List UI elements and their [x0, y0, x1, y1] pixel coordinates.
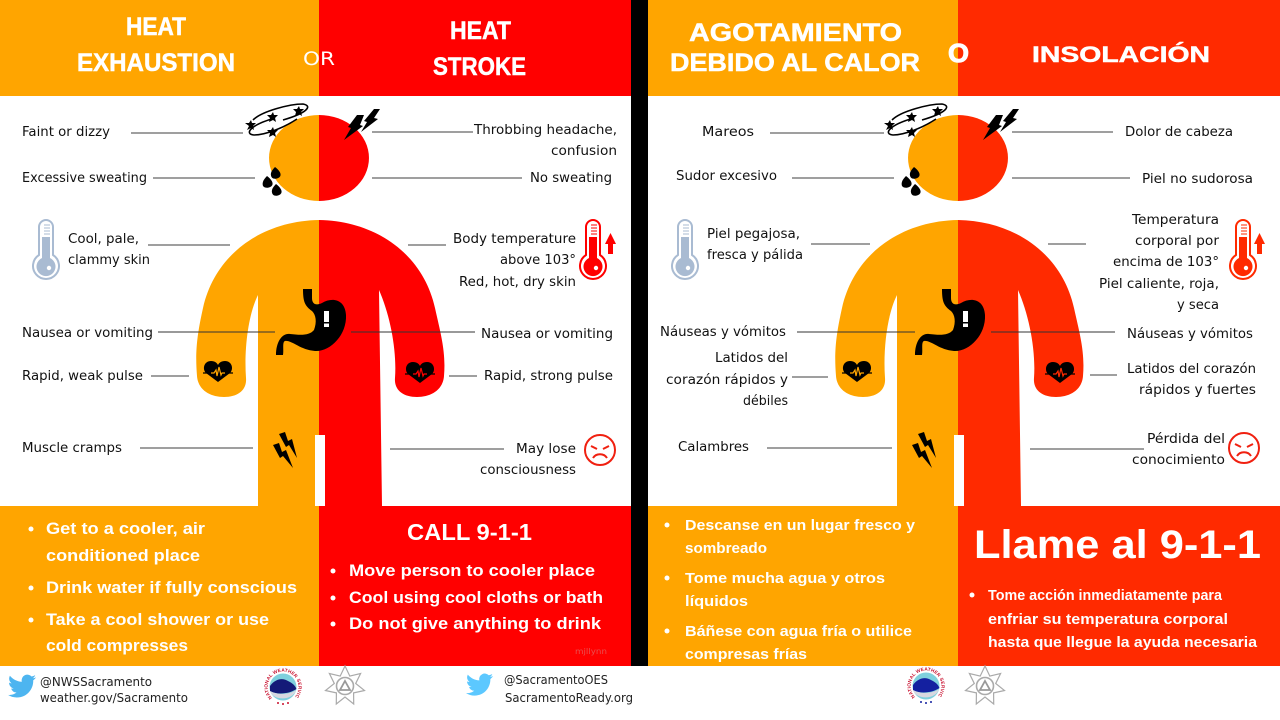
header: heat stroke: HEAT: [450, 17, 511, 45]
header: heat exhaustion: HEAT: [126, 13, 186, 41]
footer text: NWS contacts: weather.gov/Sacramento: [40, 690, 188, 705]
icon: headache lightning: [983, 109, 1019, 140]
header connector: or: OR: [303, 48, 335, 70]
symptoms: exhaustion labels: Cool, pale,: [68, 232, 139, 247]
action panel: agotamiento: líquidos: [685, 593, 748, 610]
symptoms: insolacion labels: conocimiento: [1132, 453, 1225, 468]
logo: National Weather Service: NATIONAL WEATHER SERVICE: [264, 668, 302, 700]
symptoms: agotamiento labels: Latidos del: [715, 351, 788, 366]
symptoms: insolacion labels: [991, 125, 1256, 468]
symptoms: stroke labels: Body temperature: [453, 232, 576, 247]
symptoms: agotamiento labels: Mareos: [702, 125, 754, 140]
icon: weak pulse heart: [203, 361, 233, 382]
action panel: agotamiento: Báñese con agua fría o utilice: [685, 623, 912, 640]
action panel: insolacion: Tome acción inmediatamente para: [988, 587, 1223, 604]
symptoms: stroke labels: above 103°: [500, 253, 576, 268]
footer text: OES contacts: SacramentoReady.org: [505, 690, 633, 705]
action panel: agotamiento: Tome mucha agua y otros: [685, 570, 885, 587]
action panel: insolacion: [958, 506, 1280, 666]
header: heat stroke: STROKE: [433, 53, 526, 81]
icon: stomach: [276, 289, 346, 355]
icon: sad face: [1229, 433, 1259, 463]
icon: dizziness stars: [884, 104, 947, 137]
symptoms: insolacion labels: Pérdida del: [1147, 432, 1225, 447]
icon: sweat drops: [263, 167, 282, 196]
symptoms: exhaustion labels: Rapid, weak pulse: [22, 369, 143, 384]
action panel: insolacion: enfriar su temperatura corporal: [988, 611, 1228, 628]
symptoms: insolacion labels: encima de 103°: [1113, 255, 1219, 270]
symptoms: agotamiento labels: Piel pegajosa,: [707, 227, 800, 242]
symptoms: exhaustion labels: [22, 125, 275, 456]
symptoms: stroke labels: [351, 123, 617, 478]
logo: OES star, Spanish panel: [966, 666, 1004, 704]
action panel: insolacion: hasta que llegue la ayuda necesaria: [988, 634, 1258, 651]
header: heat exhaustion: EXHAUSTION: [77, 49, 235, 77]
action panel: exhaustion: [0, 506, 319, 666]
action panel: exhaustion: conditioned place: [46, 546, 200, 565]
symptoms: insolacion labels: y seca: [1177, 298, 1219, 313]
action panel: exhaustion: Drink water if fully conscious: [46, 578, 297, 597]
symptoms: insolacion labels: Piel no sudorosa: [1142, 172, 1253, 187]
icon: hot thermometer and arrow: [580, 220, 616, 279]
symptoms: agotamiento labels: fresca y pálida: [707, 248, 803, 263]
symptoms: stroke labels: Rapid, strong pulse: [484, 369, 613, 384]
symptoms: stroke labels: Nausea or vomiting: [481, 327, 613, 342]
action panel: exhaustion: Take a cool shower or use: [46, 610, 269, 629]
action panel: agotamiento: Descanse en un lugar fresco y: [685, 517, 916, 534]
action panel: agotamiento: sombreado: [685, 540, 767, 557]
symptoms: stroke labels: Throbbing headache,: [473, 123, 617, 138]
symptoms: agotamiento labels: Náuseas y vómitos: [660, 325, 786, 340]
symptoms: exhaustion labels: Nausea or vomiting: [22, 326, 153, 341]
action panel: stroke: Move person to cooler place: [349, 561, 595, 580]
header: heat stroke: [319, 0, 631, 96]
footer text: OES contacts: [504, 672, 633, 705]
action panel: exhaustion: Get to a cooler, air: [46, 519, 205, 538]
icon: cool thermometer: [672, 220, 698, 279]
action panel: exhaustion: cold compresses: [46, 636, 188, 655]
symptoms: agotamiento labels: Calambres: [678, 440, 749, 455]
action panel: agotamiento: [648, 506, 958, 666]
header: heat exhaustion: [0, 0, 319, 96]
symptoms: insolacion labels: Piel caliente, roja,: [1099, 277, 1219, 292]
symptoms: exhaustion labels: clammy skin: [68, 253, 150, 268]
icon: stomach: [915, 289, 985, 355]
icon: muscle cramps: [273, 432, 297, 468]
header: insolacion: INSOLACIÓN: [1032, 42, 1210, 67]
icon: sweat drops: [902, 167, 921, 196]
icon: strong pulse heart: [1045, 362, 1075, 383]
icon: muscle cramps: [912, 432, 936, 468]
symptoms: stroke labels: Red, hot, dry skin: [459, 275, 576, 290]
icon: dizziness stars: [245, 104, 308, 137]
footer text: OES contacts: @SacramentoOES: [504, 672, 608, 687]
symptoms: exhaustion labels: Muscle cramps: [22, 441, 122, 456]
icon: weak pulse heart: [842, 361, 872, 382]
action panel: agotamiento: compresas frías: [685, 646, 807, 663]
symptoms: insolacion labels: Temperatura: [1131, 213, 1219, 228]
symptoms: stroke labels: consciousness: [480, 463, 576, 478]
logo: National Weather Service, Spanish panel: NATIONAL WEATHER SERVICE: [907, 667, 945, 699]
icon: hot thermometer and arrow: [1230, 220, 1265, 279]
symptoms: stroke labels: No sweating: [530, 171, 612, 186]
divider between panels: [631, 0, 648, 666]
header: agotamiento: [648, 0, 958, 96]
panel: Spanish heat illness infographic: [648, 0, 1280, 666]
symptoms: exhaustion labels: Faint or dizzy: [22, 125, 110, 140]
symptoms: stroke labels: May lose: [516, 442, 576, 457]
action panel: insolacion: Llame al 9-1-1: [974, 523, 1261, 567]
footer: [8, 664, 1006, 706]
symptoms: exhaustion labels: Excessive sweating: [22, 171, 147, 186]
body figure: [835, 115, 1083, 506]
symptoms: insolacion labels: rápidos y fuertes: [1139, 383, 1256, 398]
action panel: stroke: mjllynn: [575, 647, 607, 656]
header connector: o: O: [948, 38, 969, 68]
symptoms: insolacion labels: Latidos del corazón: [1127, 362, 1256, 377]
action panel: stroke: [319, 506, 631, 666]
footer text: NWS contacts: [40, 674, 188, 705]
header: agotamiento: AGOTAMIENTO: [689, 19, 902, 47]
icon: sad face: [585, 435, 615, 465]
panel: English heat illness infographic: [0, 0, 631, 666]
action panel: stroke: CALL 9-1-1: [407, 519, 532, 545]
symptoms: insolacion labels: Dolor de cabeza: [1125, 125, 1233, 140]
footer text: NWS contacts: @NWSSacramento: [40, 674, 152, 689]
symptoms: insolacion labels: Náuseas y vómitos: [1127, 327, 1253, 342]
symptoms: agotamiento labels: Sudor excesivo: [676, 169, 777, 184]
icon: cool thermometer: [33, 220, 59, 279]
header: agotamiento: DEBIDO AL CALOR: [670, 49, 920, 77]
action panel: stroke: Do not give anything to drink: [349, 614, 602, 633]
logo: OES star: [326, 666, 364, 704]
symptoms: agotamiento labels: débiles: [743, 394, 788, 409]
symptoms: insolacion labels: corporal por: [1135, 234, 1220, 249]
body figure: [196, 115, 444, 506]
action panel: stroke: Cool using cool cloths or bath: [349, 588, 603, 607]
icon: twitter NWS: [8, 675, 36, 697]
symptoms: stroke labels: confusion: [551, 144, 617, 159]
icon: strong pulse heart: [405, 362, 435, 383]
icon: twitter OES: [466, 674, 493, 696]
symptoms: agotamiento labels: [660, 125, 915, 455]
icon: headache lightning: [344, 109, 380, 140]
header: insolacion: [958, 0, 1280, 96]
symptoms: agotamiento labels: corazón rápidos y: [666, 373, 788, 388]
